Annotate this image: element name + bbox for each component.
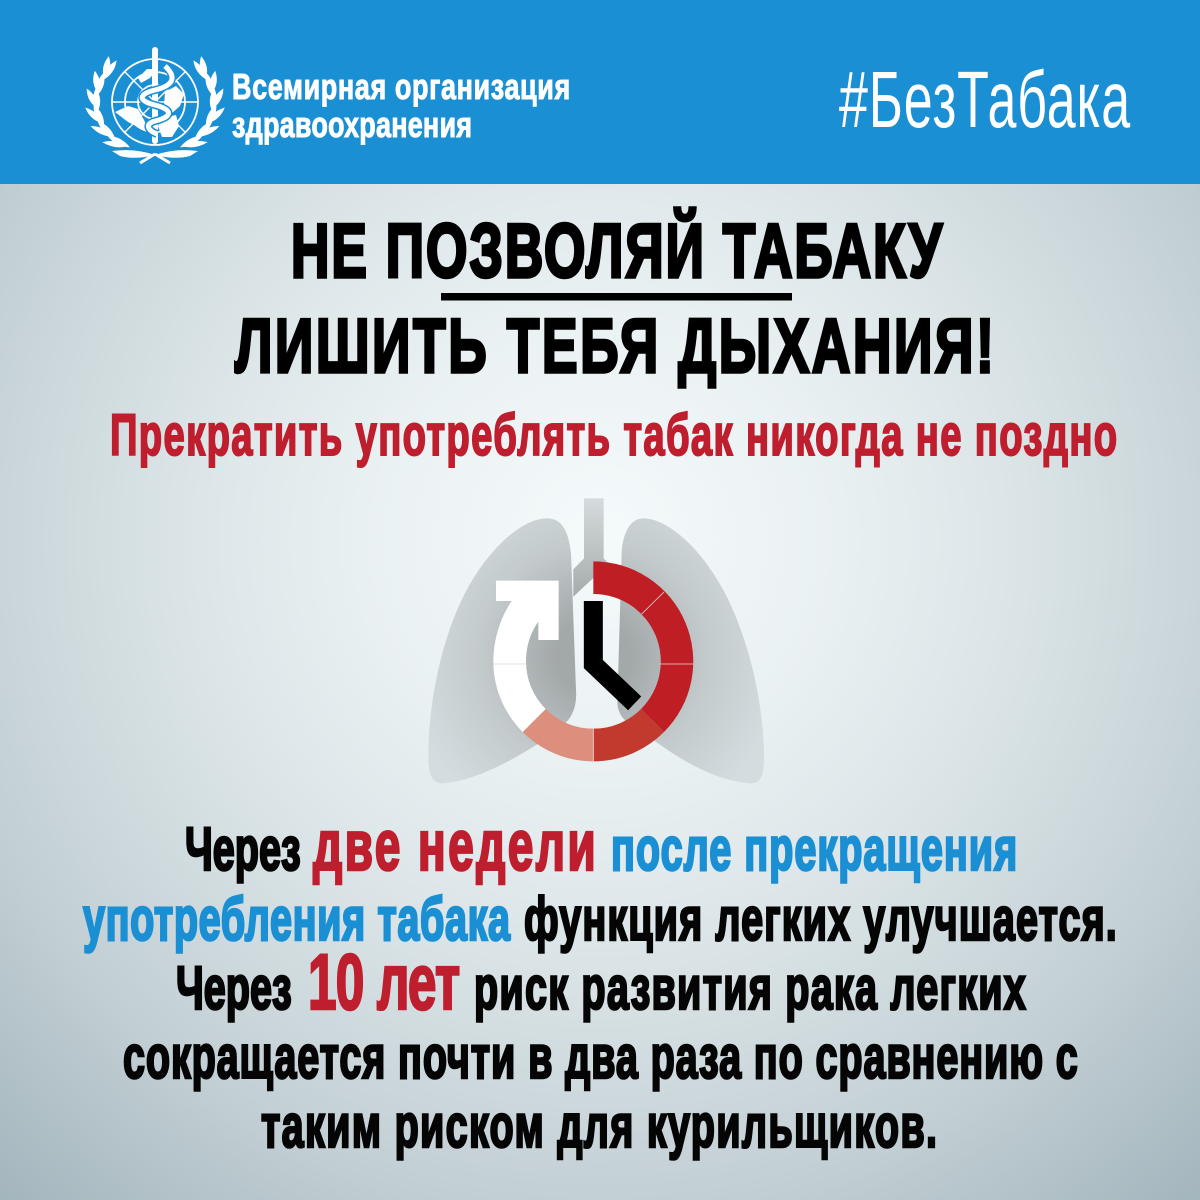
trachea [573, 498, 622, 597]
line 3: риск развития рака легких [474, 953, 1026, 1022]
line 3 [176, 939, 1026, 1027]
header band [0, 0, 1200, 184]
body text [83, 806, 1117, 1160]
ring: salmon segment [523, 709, 593, 761]
line 4: сокращается почти в два раза по сравнению с [123, 1022, 1078, 1091]
line 1: две недели [313, 806, 596, 885]
subtitle: Прекратить употреблять табак никогда не поздно [110, 404, 1117, 468]
ring: white arrow [493, 581, 559, 732]
title: ЛИШИТЬ ТЕБЯ ДЫХАНИЯ! [235, 304, 994, 388]
hashtag: #БезТабака [839, 56, 1131, 145]
left lung [428, 518, 576, 783]
line 3: Через [176, 953, 292, 1022]
organisation name: Всемирная организация [232, 66, 570, 107]
line 3: 10 лет [308, 939, 460, 1027]
clock hands [593, 601, 635, 703]
line 2: функция легких улучшается. [524, 884, 1117, 953]
ring: dark red segment [593, 561, 693, 732]
organisation name: здравоохранения [232, 104, 472, 145]
line 5: таким риском для курильщиков. [261, 1091, 937, 1160]
line 2: употребления табака [83, 884, 510, 953]
title: НЕ ПОЗВОЛЯЙ ТАБАКУ [291, 209, 943, 293]
icon: lungs with clock ring [428, 498, 764, 783]
title [235, 209, 994, 388]
line 2 [83, 884, 1117, 953]
ring: medium red segment [593, 709, 664, 761]
line 1 [185, 806, 1017, 885]
right lung [617, 518, 764, 783]
line 1: Через [185, 814, 301, 883]
organisation name [232, 66, 570, 145]
icon: WHO emblem [83, 47, 227, 163]
line 1: после прекращения [611, 814, 1017, 883]
